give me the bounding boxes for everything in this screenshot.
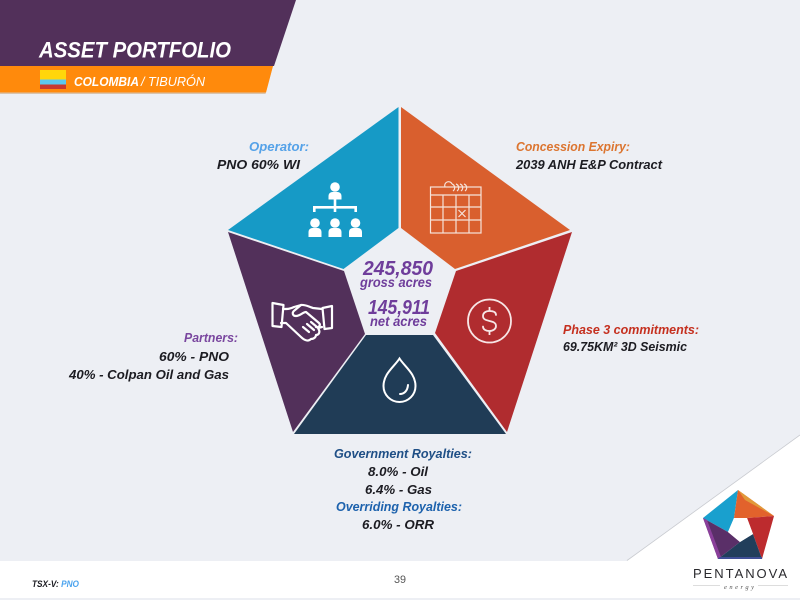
footer band xyxy=(0,561,800,598)
text block: royalties: Government Royalties: xyxy=(334,446,472,461)
subtitle: COLOMBIA xyxy=(74,74,139,89)
segment: concession (orange) xyxy=(401,107,570,269)
text block: phase 3 commitments xyxy=(563,322,699,354)
text block: royalties: 6.0% - ORR xyxy=(362,517,435,532)
icon: organisation chart xyxy=(308,182,362,237)
gross acres: 245,850 xyxy=(362,258,433,280)
centre acreage figures xyxy=(359,258,433,329)
text block: partners: 40% - Colpan Oil and Gas xyxy=(68,367,229,382)
icon: dollar coin xyxy=(468,300,511,342)
white corner background xyxy=(627,435,800,561)
text block: operator: Operator: xyxy=(249,139,309,154)
segment: operator (blue) xyxy=(228,107,398,269)
pentagon diagram xyxy=(228,107,572,434)
text block: concession expiry: Concession Expiry: xyxy=(516,139,630,154)
text block: operator: PNO 60% WI xyxy=(217,157,300,172)
icon: handshake xyxy=(272,303,332,340)
icon: calendar xyxy=(430,182,481,233)
subtitle: / TIBURÓN xyxy=(140,74,206,89)
text block: royalties: 8.0% - Oil xyxy=(368,464,428,479)
text block: royalties: 6.4% - Gas xyxy=(365,482,432,497)
logo: Pentanova xyxy=(693,490,788,591)
net acres xyxy=(368,297,430,329)
segment: royalties (navy) xyxy=(294,335,506,434)
gross acres xyxy=(359,258,433,290)
text block: partners: Partners: xyxy=(184,330,238,345)
page number: 39 xyxy=(394,574,406,586)
text block: phase 3 commitments: Phase 3 commitments: xyxy=(563,322,699,337)
icon: Colombia flag xyxy=(40,70,66,89)
logo tagline: energy xyxy=(724,584,754,591)
text block: concession expiry: 2039 ANH E&P Contract xyxy=(515,157,663,172)
header banner xyxy=(0,0,296,94)
segment: partners (purple) xyxy=(228,232,365,432)
text block: royalties xyxy=(334,446,472,532)
text block: phase 3 commitments: 69.75KM² 3D Seismic xyxy=(563,339,688,354)
title: ASSET PORTFOLIO xyxy=(38,38,231,62)
logo mark xyxy=(703,490,774,559)
segment: commitments (red) xyxy=(435,232,572,432)
net acres: net acres xyxy=(370,313,427,329)
net acres: 145,911 xyxy=(368,297,430,319)
text block: operator xyxy=(217,139,309,172)
text block: partners: 60% - PNO xyxy=(159,349,229,364)
text block: partners xyxy=(68,330,238,382)
logo wordmark: PENTANOVA xyxy=(693,566,787,581)
ticker label: TSX-V: PNO xyxy=(32,579,79,589)
text block: concession expiry xyxy=(515,139,663,172)
text block: royalties: Overriding Royalties: xyxy=(336,499,462,514)
icon: water drop xyxy=(384,358,416,402)
gross acres: gross acres xyxy=(359,274,432,290)
